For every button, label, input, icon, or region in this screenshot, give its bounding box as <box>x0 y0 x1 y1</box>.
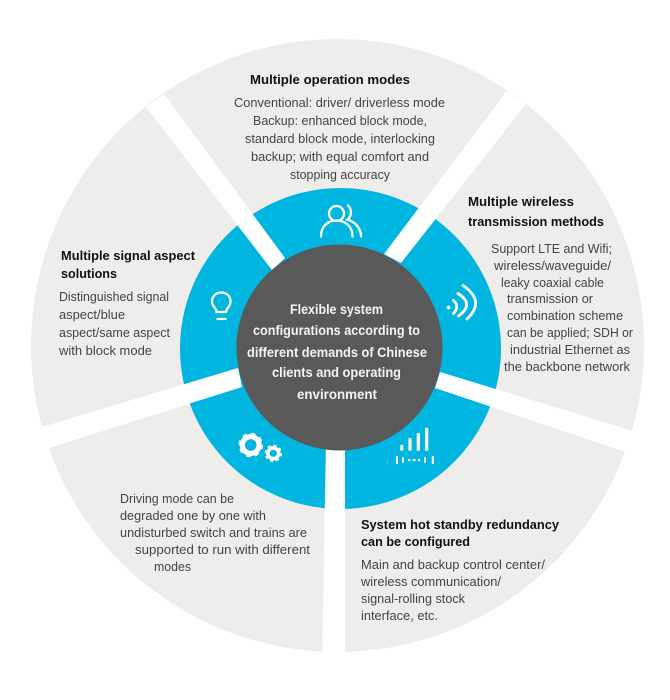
panel: multiple operation modes: standard block mode, interlocking <box>245 132 435 146</box>
panel: driving mode degradation: degraded one by one with <box>120 509 266 523</box>
panel: multiple wireless transmission methods <box>468 194 633 374</box>
panel: multiple signal aspect solutions: aspect/same aspect <box>59 326 171 340</box>
panel: multiple operation modes: backup; with equal comfort and <box>251 150 429 164</box>
panel: multiple operation modes <box>234 72 445 182</box>
panel: system hot standby redundancy: signal-rolling stock <box>361 592 466 606</box>
panel: multiple signal aspect solutions <box>58 248 196 358</box>
centre text: clients and operating <box>272 365 401 380</box>
panel: multiple wireless transmission methods: transmission methods <box>468 214 604 229</box>
blue ring <box>180 188 501 509</box>
panel: multiple signal aspect solutions: aspect/blue <box>59 308 125 322</box>
panel: system hot standby redundancy: can be configured <box>361 534 470 549</box>
panel: multiple signal aspect solutions: Distinguished signal <box>59 290 169 304</box>
panel: system hot standby redundancy: System hot standby redundancy <box>361 517 560 532</box>
panel: multiple operation modes: Backup: enhanced block mode, <box>253 114 427 128</box>
panel: driving mode degradation: undisturbed switch and trains are <box>120 526 307 540</box>
icon: gears <box>240 434 281 461</box>
panel: system hot standby redundancy: wireless communication/ <box>360 575 502 589</box>
panel: driving mode degradation: supported to run with different <box>135 543 311 557</box>
panel: multiple wireless transmission methods: combination scheme <box>507 309 623 323</box>
panel: system hot standby redundancy: interface, etc. <box>361 609 438 623</box>
panel: multiple wireless transmission methods: the backbone network <box>504 360 631 374</box>
panel: driving mode degradation: Driving mode can be <box>120 492 234 506</box>
panel: multiple signal aspect solutions: solutions <box>61 266 117 281</box>
panel: multiple wireless transmission methods: industrial Ethernet as <box>510 343 630 357</box>
panel: multiple operation modes: stopping accuracy <box>290 168 391 182</box>
panel: driving mode degradation: modes <box>154 560 191 574</box>
icon: wireless signal <box>447 286 476 319</box>
centre text <box>247 302 427 402</box>
icon: signal bars <box>396 428 434 464</box>
panel: system hot standby redundancy <box>360 517 560 623</box>
centre text: configurations according to <box>253 323 420 338</box>
centre circle <box>236 244 442 450</box>
panel: multiple wireless transmission methods: can be applied; SDH or <box>507 326 633 340</box>
panel: system hot standby redundancy: Main and backup control center/ <box>361 558 546 572</box>
panel: multiple wireless transmission methods: Support LTE and Wifi; <box>491 242 612 256</box>
panel: multiple signal aspect solutions: with block mode <box>58 344 152 358</box>
panel: driving mode degradation <box>120 492 311 574</box>
panel: multiple operation modes: Multiple operation modes <box>250 72 410 87</box>
centre text: different demands of Chinese <box>247 345 427 360</box>
centre text: environment <box>297 387 377 402</box>
panel: multiple wireless transmission methods: leaky coaxial cable <box>501 276 604 290</box>
centre text: Flexible system <box>290 302 383 317</box>
panel: multiple wireless transmission methods: Multiple wireless <box>468 194 574 209</box>
panel: multiple wireless transmission methods: wireless/waveguide/ <box>493 259 612 273</box>
panel: multiple operation modes: Conventional: driver/ driverless mode <box>234 96 445 110</box>
panel: multiple signal aspect solutions: Multiple signal aspect <box>61 248 196 263</box>
icon: people <box>321 206 361 236</box>
panel: multiple wireless transmission methods: transmission or <box>507 292 593 306</box>
icon: light bulb <box>212 292 230 319</box>
